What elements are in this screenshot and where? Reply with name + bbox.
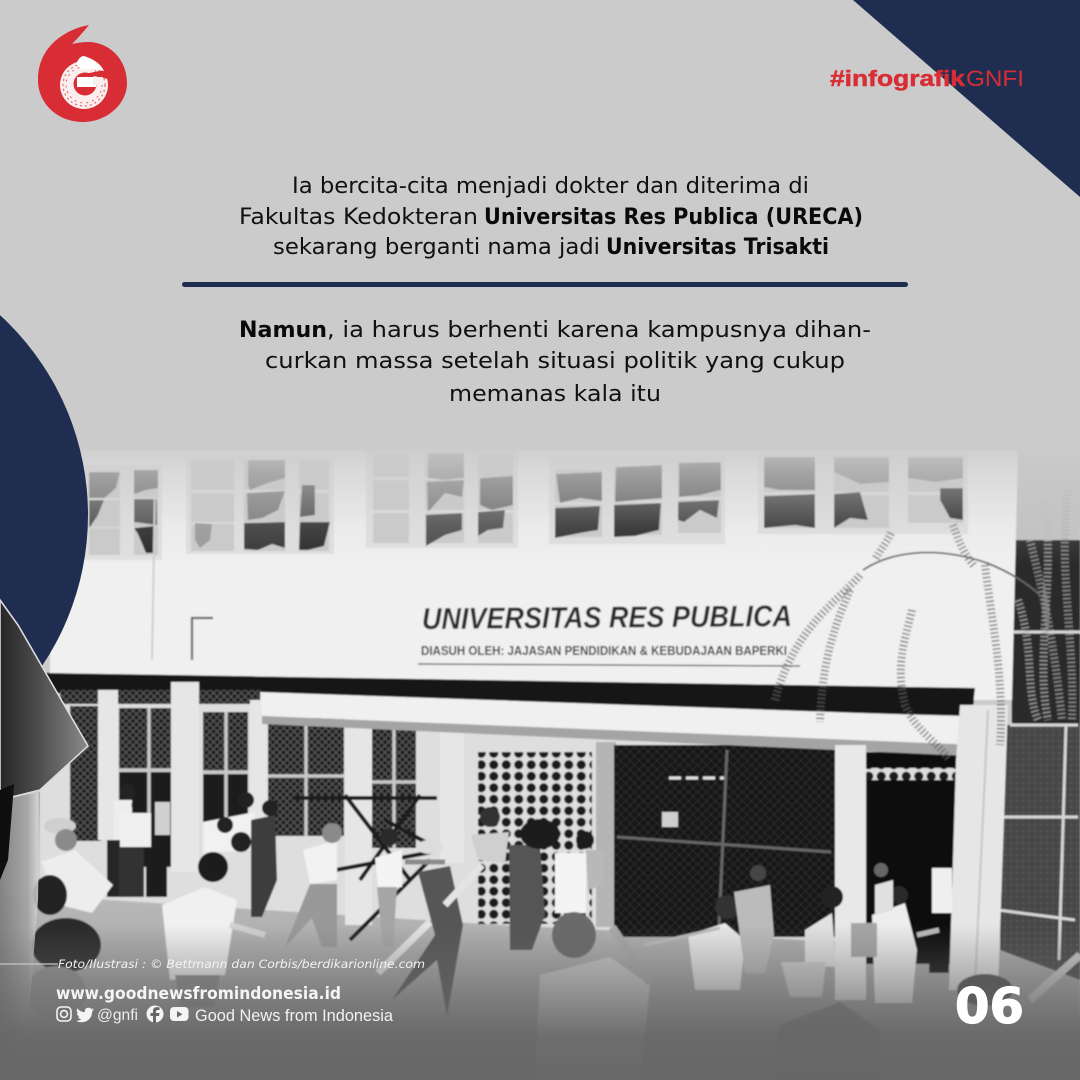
dark doorway: [862, 752, 962, 964]
fade of photo top into grey: [0, 440, 1080, 565]
handle: @gnfi: [97, 1007, 138, 1024]
navy circle: [0, 244, 88, 786]
broken chairs frame: [292, 795, 440, 940]
paragraph one: Fakultas Kedokteran: [239, 204, 478, 230]
lattice wall: [478, 752, 592, 924]
foreground figure at left edge: [0, 600, 88, 1080]
paragraph one: Universitas Trisakti: [606, 234, 829, 260]
hashtag: [830, 66, 1024, 91]
paragraph one: Ia bercita-cita menjadi dokter dan diterima di: [292, 173, 809, 199]
photo: Universitas Res Publica building and crowd: [0, 450, 1080, 1080]
people with chairs: [285, 823, 482, 1017]
crowd: [26, 784, 1080, 1080]
front pillars: [835, 705, 1008, 1000]
ground-floor wall and dark fascia: [40, 690, 1000, 950]
paragraph one: sekarang berganti nama jadi: [273, 234, 600, 260]
icon: twitter: [76, 1008, 94, 1022]
people at the door: [688, 863, 952, 1003]
people at lattice wall: [471, 807, 605, 950]
ground: [0, 895, 1080, 1080]
upper windows with broken glass: [82, 450, 968, 560]
dark meshed doors: [596, 742, 838, 937]
GNFI logo: [38, 25, 127, 122]
person group centre-left: [162, 792, 278, 1007]
social row: [57, 1006, 394, 1025]
paragraph two: , ia harus berhenti karena kampusnya dihan-: [327, 317, 871, 343]
paragraph one: Universitas Res Publica (URECA): [484, 204, 863, 230]
page number: 06: [955, 978, 1024, 1035]
person group left: [26, 784, 170, 1018]
right side panel wall: [995, 450, 1080, 985]
hashtag: #infografik: [830, 66, 966, 91]
icon: facebook: [146, 1006, 164, 1023]
foreground people: [535, 912, 1080, 1080]
building sign: DIASUH OLEH: JAJASAN PENDIDIKAN & KEBUDAJAAN BAPERKI: [421, 644, 787, 658]
paragraph two: curkan massa setelah situasi politik yang cukup: [265, 348, 845, 374]
hanging tree branches: [775, 490, 1072, 760]
website url: www.goodnewsfromindonesia.id: [56, 984, 341, 1004]
channel name: Good News from Indonesia: [195, 1006, 394, 1025]
entrance canopy: [260, 692, 977, 745]
divider: [182, 282, 908, 287]
left meshed windows: [70, 706, 416, 867]
hashtag: GNFI: [966, 66, 1024, 91]
wall marks: [192, 618, 213, 660]
paragraph one: [239, 173, 863, 260]
paragraph two: Namun: [239, 317, 327, 343]
columns: [98, 682, 464, 925]
building facade: [50, 450, 1018, 700]
photo credit: Foto/Ilustrasi : © Bettmann dan Corbis/berdikarionline.com: [58, 957, 425, 971]
building sign: UNIVERSITAS RES PUBLICA: [422, 600, 792, 636]
paragraph two: memanas kala itu: [449, 381, 661, 407]
icon: instagram: [57, 1007, 71, 1021]
paragraph two: [239, 317, 871, 407]
icon: youtube: [170, 1007, 188, 1021]
top-right navy triangle: [853, 0, 1080, 197]
bottom dark gradient: [0, 925, 1080, 1080]
building sign: [418, 600, 800, 666]
